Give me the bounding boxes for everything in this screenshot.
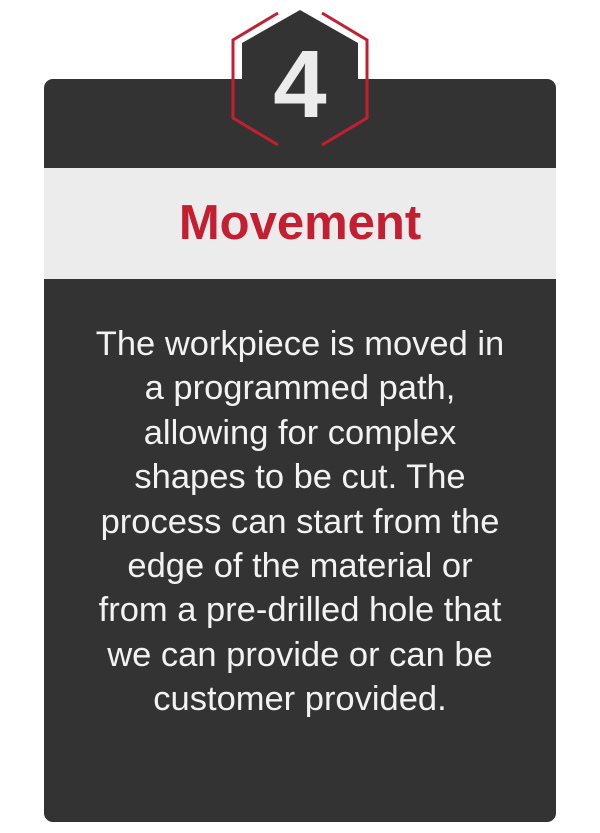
body text: a programmed path,: [145, 369, 455, 407]
card panel: [44, 79, 556, 822]
body text: allowing for complex: [144, 414, 456, 452]
body text: edge of the material or: [127, 547, 473, 585]
icon: number hexagon: [232, 10, 368, 146]
title band: [44, 168, 556, 279]
body text: [96, 325, 504, 718]
body text: from a pre-drilled hole that: [99, 591, 501, 629]
body text: process can start from the: [101, 503, 499, 541]
title: Movement: [179, 196, 421, 250]
body text: customer provided.: [153, 680, 447, 718]
icon: number hexagon: 4: [273, 31, 327, 138]
body text: The workpiece is moved in: [96, 325, 504, 363]
body text: we can provide or can be: [107, 636, 493, 674]
body text: shapes to be cut. The: [134, 458, 466, 496]
